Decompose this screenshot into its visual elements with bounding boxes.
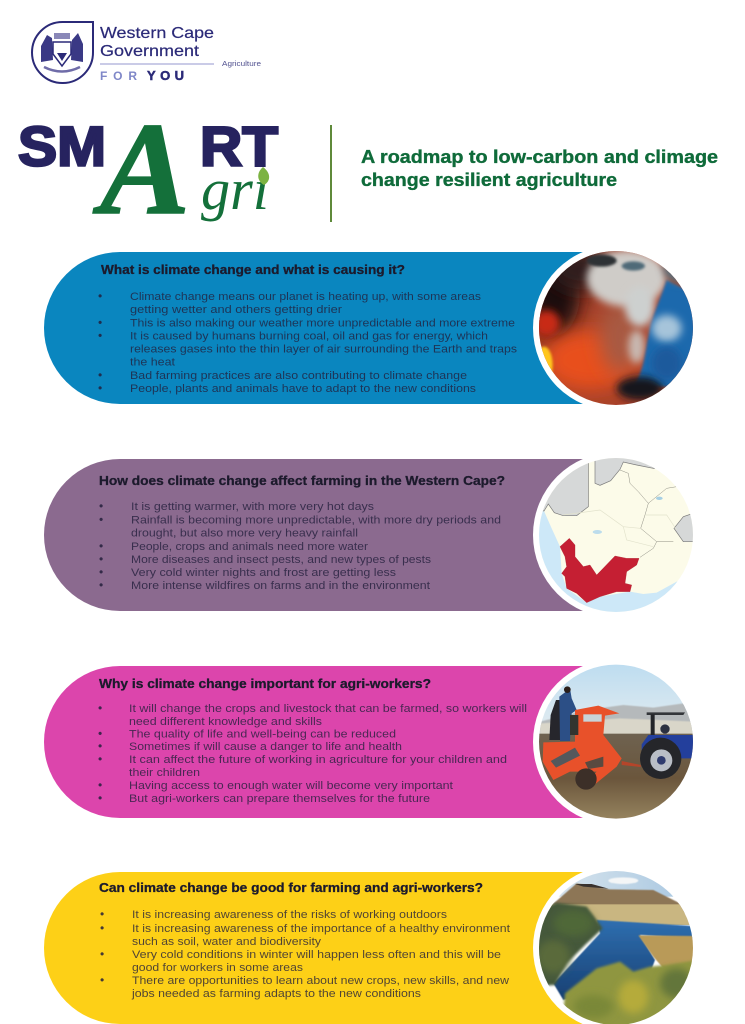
bullet list: Very cold winter nights and frost are getting less [131,567,397,579]
bullet list: • [98,778,102,792]
bullet list: • [99,499,103,513]
bullet list: Climate change means our planet is heating up, with some areas [130,291,482,303]
bullet list [100,907,510,1000]
logo wordmark: YOU [147,68,184,83]
heading: How does climate change affect farming in the Western Cape? [99,473,505,488]
bullet list: • [98,368,102,382]
logo wordmark: Government [100,43,200,60]
bullet list: • [98,701,102,715]
bullet list: • [98,726,102,740]
divider [330,125,332,222]
bullet list: drought, but also more very heavy rainfall [131,528,358,540]
bullet list: • [100,973,104,987]
logo wordmark: Agriculture [222,59,261,68]
logo: Smart Agri [18,95,278,242]
bullet list: • [98,739,102,753]
bullet list: Bad farming practices are also contributing to climate change [130,370,467,382]
blue tractor [647,712,685,715]
bullet list: More intense wildfires on farms and in the environment [131,580,430,592]
heading: Can climate change be good for farming and agri-workers? [99,880,483,895]
bullet list: This is also making our weather more unpredictable and more extreme [130,317,515,329]
Western Cape region [560,538,639,603]
panel background [44,872,620,1024]
bullet list: Having access to enough water will become very important [129,780,453,792]
wordmark: script A: A [93,95,190,242]
bullet list: Rainfall is becoming more unpredictable, with more dry periods and [131,514,501,526]
bullet list: It is caused by humans burning coal, oil and gas for energy, which [130,330,488,342]
wordmark: SM: SM [18,114,106,178]
bullet list [99,499,501,592]
bullet list: There are opportunities to learn about new crops, new skills, and new [132,975,509,987]
bullet list: But agri-workers can prepare themselves for the future [129,793,430,805]
tagline [361,147,718,190]
bullet list: • [100,947,104,961]
bullet list: • [98,791,102,805]
bullet list: Sometimes if will cause a danger to life and health [129,741,402,753]
bullet list: • [99,539,103,553]
heading: Why is climate change important for agri-workers? [99,676,431,691]
image: planet half burning, half blue [539,251,693,405]
bullet list: • [98,381,102,395]
bullet list: • [100,907,104,921]
panel background [44,252,620,404]
bullet list [98,289,518,395]
bullet list: jobs needed as farming adapts to the new conditions [131,988,422,1000]
panel: what is climate change [44,245,700,411]
bullet list: need different knowledge and skills [129,716,323,728]
bullet list: • [100,921,104,935]
bullet list: • [98,752,102,766]
bullet list: getting wetter and others getting drier [130,304,342,316]
panel: why it matters for agri-workers [44,659,700,825]
bullet list: good for workers in some areas [132,962,304,974]
icon: provincial crest shield [32,22,93,83]
workers [549,700,560,740]
wordmark: RT: RT [200,114,278,178]
bullet list: It will change the crops and livestock that can be farmed, so workers will [129,703,527,715]
orange planter [543,706,622,788]
image: workers on orange planter behind blue tractor [539,664,693,819]
bullet list: • [99,578,103,592]
tagline: change resilient agriculture [361,170,617,190]
panel background [44,666,620,818]
bullet list [98,701,527,805]
bullet list: It can affect the future of working in agriculture for your children and [129,754,507,766]
logo wordmark: Western Cape [100,25,214,42]
logo: Western Cape Government [32,22,261,83]
bullet list: • [99,512,103,526]
bullet list: • [99,565,103,579]
panel: effect on farming in the Western Cape [44,452,700,618]
panel: can climate change be good [44,865,700,1024]
bullet list: People, plants and animals have to adapt to the new conditions [130,383,477,395]
bullet list: It is getting warmer, with more very hot days [131,501,375,513]
bullet list: More diseases and insect pests, and new types of pests [131,554,432,566]
image: river and wetlands [539,871,693,1024]
icon: leaf [258,167,269,185]
bullet list: • [99,552,103,566]
bullet list: • [98,289,102,303]
logo wordmark: FOR [100,69,137,83]
logo wordmark [100,25,261,83]
bullet list: • [98,328,102,342]
bullet list: The quality of life and well-being can be reduced [129,728,396,740]
bullet list: It is increasing awareness of the importance of a healthy environment [132,923,510,935]
bullet list: People, crops and animals need more water [131,541,368,553]
bullet list: such as soil, water and biodiversity [132,936,322,948]
bullet list: their children [129,767,200,779]
tagline: A roadmap to low-carbon and climage [361,147,718,167]
heading: What is climate change and what is causing it? [101,262,405,277]
bullet list: releases gases into the thin layer of air surrounding the Earth and traps [130,343,518,355]
wordmark: gri: gri [201,157,269,222]
bullet list: Very cold conditions in winter will happen less often and this will be [132,949,501,961]
bullet list: It is increasing awareness of the risks of working outdoors [132,909,448,921]
bullet list: the heat [130,357,175,369]
map: South Africa with Western Cape highlighted [539,458,693,612]
bullet list: • [98,315,102,329]
panel background [44,459,620,611]
